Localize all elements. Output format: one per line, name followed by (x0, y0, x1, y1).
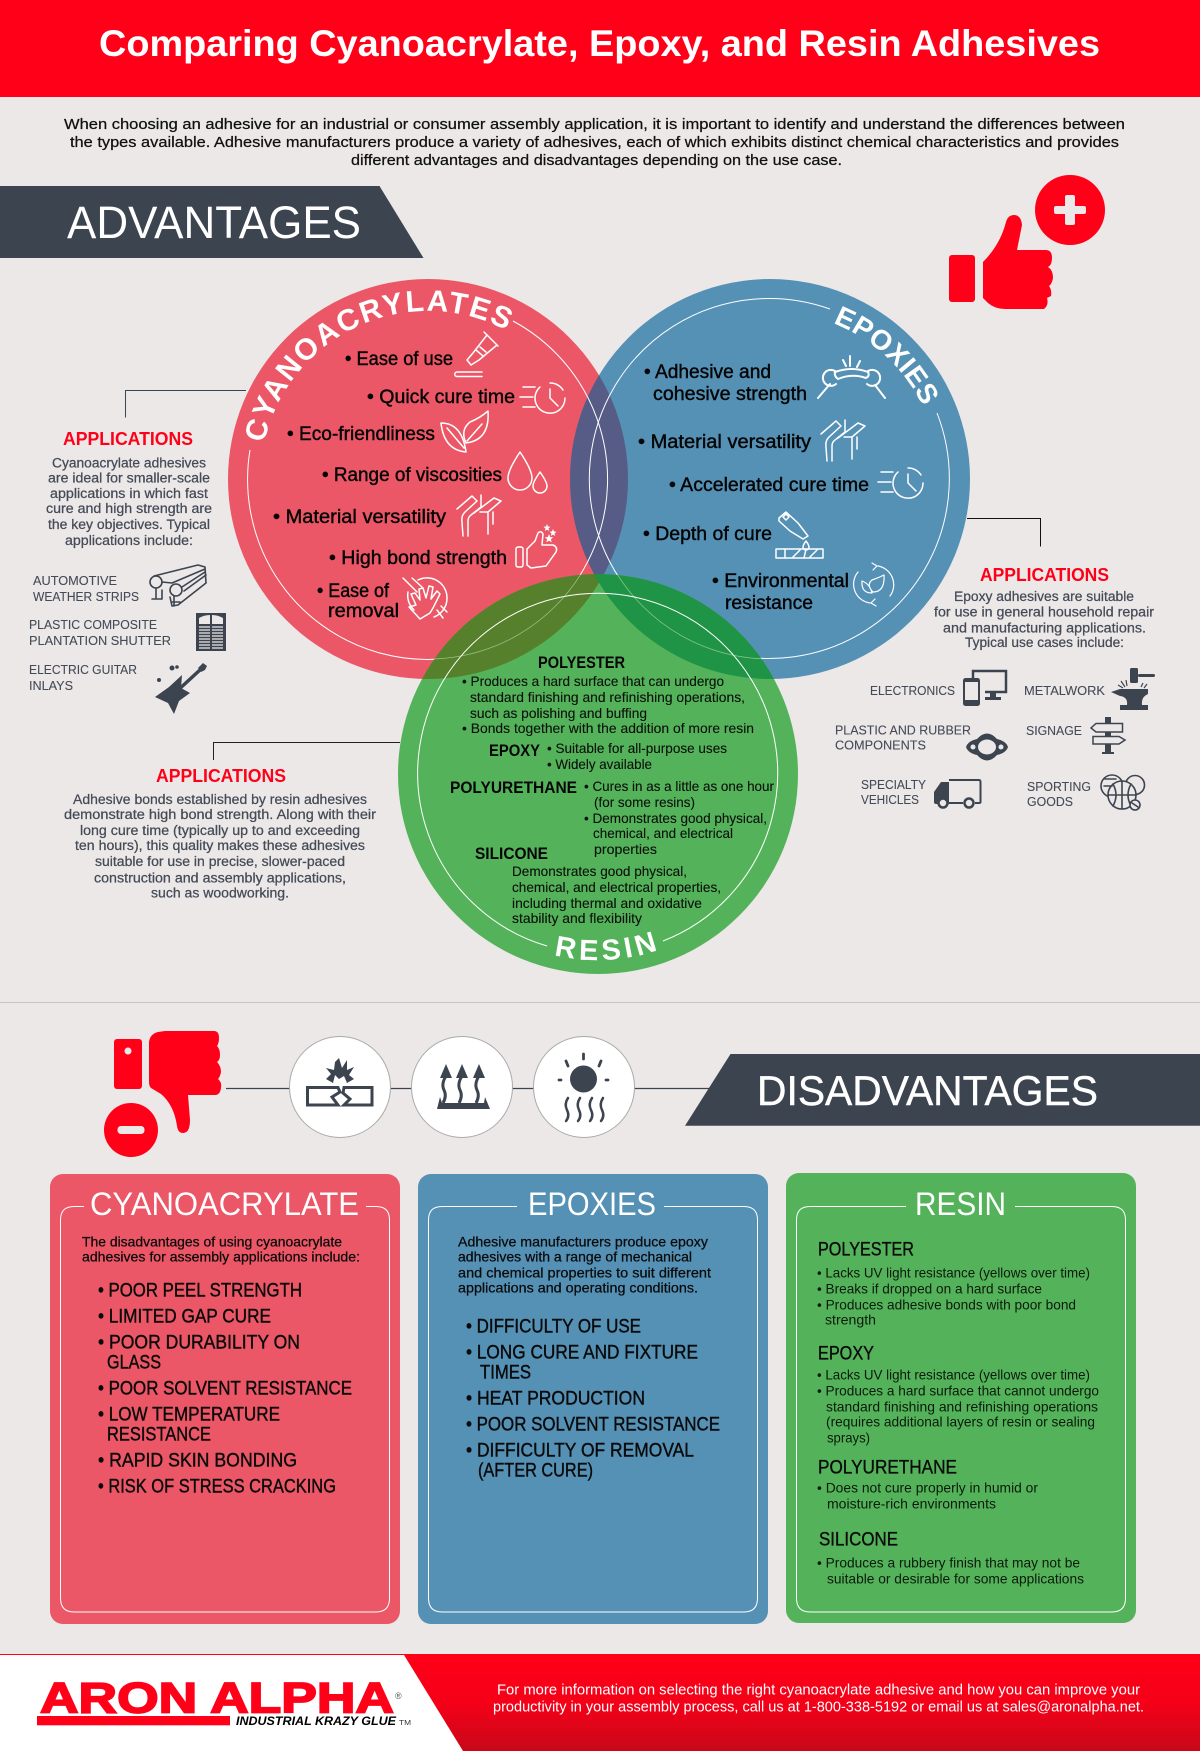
ring: epoxies (589, 298, 949, 658)
silicone: suitable or desirable for some applications (827, 1571, 1084, 1586)
polyester (462, 653, 754, 736)
bullet: ease of use: • Ease of use (345, 349, 453, 370)
epoxy: • Suitable for all-purpose uses (547, 740, 727, 756)
circle: epoxies (570, 279, 970, 679)
silicone: including thermal and oxidative (512, 895, 702, 911)
footer contact text (493, 1682, 1144, 1715)
connector: cyanoacrylate applications (126, 390, 246, 418)
intro paragraph (64, 116, 1125, 169)
polyester: • Bonds together with the addition of more resin (462, 720, 754, 736)
bullet: environmental resistance (712, 571, 849, 614)
bullet: adhesive and cohesive strength: cohesive strength (653, 384, 807, 405)
panel intro (82, 1234, 360, 1265)
polyester: POLYESTER (818, 1240, 914, 1261)
label: metalwork: METALWORK (1024, 683, 1105, 698)
panel intro (458, 1234, 711, 1296)
applications description: construction and assembly applications, (94, 870, 346, 886)
label: electric guitar inlays: ELECTRIC GUITAR (29, 662, 137, 677)
panel bullet list: RESISTANCE (107, 1424, 211, 1446)
polyurethane: moisture-rich environments (827, 1496, 996, 1511)
panel title: EPOXIES (528, 1186, 656, 1222)
icon: shutter (196, 613, 226, 651)
applications heading: APPLICATIONS (156, 765, 286, 786)
overlap: epoxies and resin (594, 574, 774, 679)
silicone (817, 1530, 1084, 1586)
panel bullet list: • RISK OF STRESS CRACKING (98, 1476, 336, 1498)
logo: aron alpha: TM (399, 1720, 411, 1727)
silicone: SILICONE (475, 844, 548, 863)
applications description: for use in general household repair (934, 604, 1155, 619)
panel: resin disadvantages (786, 1173, 1136, 1623)
label: specialty vehicles: SPECIALTY (861, 777, 926, 792)
applications description: suitable for use in precise, slower-paced (95, 854, 345, 869)
ring: cyanoacrylates (248, 321, 608, 659)
label: plantation shutter: PLANTATION SHUTTER (29, 633, 171, 648)
applications description: the key objectives. Typical (48, 517, 210, 532)
applications description: applications in which fast (50, 486, 208, 501)
panel bullet list: TIMES (480, 1361, 531, 1383)
panel bullet list: • HEAT PRODUCTION (466, 1388, 645, 1410)
intro paragraph: When choosing an adhesive for an industrial or consumer assembly application, it is important to identify and understand the differences between (64, 116, 1125, 133)
applications description: applications include: (65, 533, 193, 548)
footer contact text: For more information on selecting the right cyanoacrylate adhesive and how you can improve your (497, 1682, 1140, 1698)
applications description (934, 589, 1155, 650)
resin applications (64, 765, 377, 900)
polyester: standard finishing and refinishing operations, (470, 689, 745, 705)
icon: heat rising circle (412, 1036, 512, 1138)
resin advantages text (450, 653, 774, 926)
bullet: environmental resistance: • Environmental (712, 571, 849, 592)
bullet: ease of removal (317, 581, 399, 622)
applications heading: APPLICATIONS (980, 564, 1109, 585)
icon: signpost (1091, 717, 1125, 754)
title: Comparing Cyanoacrylate, Epoxy, and Resin Adhesives (99, 23, 1100, 64)
polyester: • Breaks if dropped on a hard surface (817, 1281, 1042, 1296)
curved label: cyanoacrylates: CYANOACRYLATES (246, 290, 512, 440)
panel bullet list: • DIFFICULTY OF REMOVAL (466, 1440, 694, 1462)
polyurethane: • Demonstrates good physical, (584, 810, 767, 826)
polyurethane: chemical, and electrical (593, 825, 733, 841)
bullet: adhesive and cohesive strength (644, 362, 807, 405)
panel intro: adhesives for assembly applications include: (82, 1249, 360, 1265)
polyurethane: (for some resins) (594, 794, 695, 810)
panel intro: and chemical properties to suit different (458, 1265, 711, 1281)
label: sporting goods: GOODS (1027, 794, 1073, 809)
applications description: ten hours), this quality makes these adhesives (75, 838, 365, 853)
panel bullet list: • LIMITED GAP CURE (98, 1306, 271, 1328)
panel bullet list: • POOR SOLVENT RESISTANCE (466, 1414, 720, 1436)
applications description: Adhesive bonds established by resin adhesives (73, 792, 367, 807)
cyanoacrylate applications (29, 428, 226, 714)
bullet: accelerated cure time: • Accelerated cure time (669, 475, 869, 496)
polyester: such as polishing and buffing (470, 705, 647, 721)
panel intro: adhesives with a range of mechanical (458, 1249, 692, 1265)
applications heading: APPLICATIONS (63, 428, 193, 449)
silicone: SILICONE (819, 1530, 898, 1551)
label: specialty vehicles: VEHICLES (861, 792, 919, 807)
panel title: CYANOACRYLATE (90, 1186, 359, 1222)
polyester: • Produces a hard surface that can undergo (462, 673, 724, 689)
panel title: RESIN (915, 1186, 1006, 1222)
polyurethane (450, 778, 774, 857)
applications description: Epoxy adhesives are suitable (954, 589, 1134, 604)
polyurethane: • Cures in as a little as one hour (584, 778, 774, 794)
overlap: cyanoacrylates and epoxies (570, 376, 628, 574)
epoxy: standard finishing and refinishing operations (826, 1399, 1098, 1414)
bullet: material versatility: • Material versatility (638, 432, 812, 453)
applications description: are ideal for smaller-scale (48, 470, 210, 486)
advantages heading: ADVANTAGES (67, 197, 361, 248)
epoxy (817, 1344, 1099, 1445)
silicone: Demonstrates good physical, (512, 863, 687, 879)
applications description: and manufacturing applications. (943, 620, 1146, 635)
icon: thumb with stars (516, 524, 557, 568)
panel bullet list: • LONG CURE AND FIXTURE (466, 1342, 698, 1364)
polyester (817, 1240, 1090, 1327)
panel bullet list (466, 1316, 720, 1482)
panel bullet list: • DIFFICULTY OF USE (466, 1316, 641, 1338)
divider (0, 1002, 1200, 1003)
icon: weather strips (150, 565, 206, 606)
panel bullet list: • POOR PEEL STRENGTH (98, 1280, 302, 1302)
bullet: range of viscosities: • Range of viscosities (322, 465, 502, 486)
panel bullet list: GLASS (107, 1351, 161, 1373)
footer contact text: productivity in your assembly process, call us at 1-800-338-5192 or email us at sales@aronalpha.net. (493, 1699, 1144, 1715)
advantages banner (0, 186, 424, 258)
silicone: stability and flexibility (512, 910, 642, 926)
label: sporting goods: SPORTING (1027, 779, 1091, 794)
label: electric guitar inlays (29, 662, 137, 693)
logo: aron alpha: INDUSTRIAL KRAZY GLUE (236, 1714, 397, 1728)
bullet: high bond strength: • High bond strength (329, 548, 507, 569)
epoxy (489, 740, 727, 772)
silicone: • Produces a rubbery finish that may not be (817, 1555, 1080, 1570)
bullet: quick cure time: • Quick cure time (367, 387, 515, 408)
silicone (475, 844, 721, 926)
epoxy: sprays) (827, 1430, 870, 1445)
epoxy: • Lacks UV light resistance (yellows over time) (817, 1367, 1090, 1382)
bullet: adhesive and cohesive strength: • Adhesive and (644, 362, 771, 383)
icon: cohesive bond (818, 356, 885, 398)
overlap: cyanoacrylates and resin (422, 574, 604, 679)
icon: sports balls (1101, 775, 1144, 810)
epoxy: (requires additional layers of resin or sealing (826, 1414, 1095, 1429)
label: specialty vehicles (861, 777, 926, 807)
circle: resin (398, 574, 798, 974)
icon: bonded brackets (457, 495, 501, 536)
epoxy: • Produces a hard surface that cannot undergo (817, 1383, 1099, 1398)
applications description: such as woodworking. (151, 886, 289, 900)
label: sporting goods (1027, 779, 1091, 809)
bullet: ease of removal: • Ease of (317, 581, 390, 602)
label: plastic and rubber components: COMPONENTS (835, 737, 926, 752)
panel bullet list (98, 1280, 352, 1498)
label: plantation shutter (29, 617, 171, 648)
polyurethane: properties (594, 841, 657, 857)
bullet: depth of cure: • Depth of cure (643, 524, 772, 545)
icon: bonded brackets (821, 420, 865, 461)
logo: aron alpha: ARON ALPHA (40, 1675, 394, 1723)
label: signage: SIGNAGE (1026, 723, 1082, 738)
logo: aron alpha: ® (395, 1691, 402, 1701)
label: electronics: ELECTRONICS (870, 683, 955, 698)
label: automotive weather strips: AUTOMOTIVE (33, 573, 117, 588)
silicone: chemical, and electrical properties, (512, 879, 721, 895)
curved label: epoxies: EPOXIES (834, 306, 938, 404)
label: plantation shutter: PLASTIC COMPOSITE (29, 617, 157, 632)
disadvantages heading: DISADVANTAGES (757, 1067, 1098, 1114)
icon: fast clock (520, 383, 565, 413)
icon: thumbs up with plus (949, 175, 1105, 309)
panel: epoxies disadvantages (418, 1174, 768, 1624)
panel: cyanoacrylate disadvantages (50, 1174, 400, 1624)
panel bullet list: (AFTER CURE) (478, 1460, 593, 1482)
polyurethane (817, 1458, 1038, 1511)
bullet: environmental resistance: resistance (725, 593, 813, 614)
polyurethane: POLYURETHANE (450, 778, 577, 797)
connector: epoxy applications (967, 518, 1040, 546)
applications description (46, 456, 212, 548)
applications description: Typical use cases include: (965, 635, 1124, 650)
connector: resin applications (214, 742, 400, 760)
polyester: • Lacks UV light resistance (yellows over time) (817, 1265, 1090, 1280)
panel bullet list: • LOW TEMPERATURE (98, 1404, 280, 1426)
venn diagram (228, 279, 970, 974)
disadvantages banner (685, 1054, 1200, 1126)
icon: wiping hand (403, 578, 447, 619)
icon: fast clock (878, 468, 923, 498)
footer (0, 1654, 1200, 1751)
epoxy: • Widely available (547, 756, 652, 772)
applications description (64, 792, 377, 900)
panel bullet list: • POOR DURABILITY ON (98, 1332, 300, 1354)
icon: broken bond circle (290, 1036, 390, 1138)
intro paragraph: the types available. Adhesive manufacturers produce a variety of adhesives, each of which exhibits distinct chemical characteristics and provides (70, 134, 1119, 151)
faint rings inside resin (434, 574, 762, 660)
panel intro: applications and operating conditions. (458, 1280, 698, 1296)
epoxy: EPOXY (818, 1344, 874, 1365)
icon: truck (934, 780, 980, 808)
applications description: Cyanoacrylate adhesives (52, 456, 206, 470)
icon: environment cycle (854, 563, 894, 606)
logo: aron alpha (37, 1675, 411, 1728)
epoxy: EPOXY (489, 741, 541, 760)
icon: drops (508, 452, 547, 493)
icon: electric guitar (155, 663, 207, 714)
icon: applicator over surface (776, 512, 823, 558)
epoxy applications (835, 564, 1155, 810)
icon: gasket (966, 734, 1008, 760)
icon: electronics (963, 671, 1006, 706)
bullet: eco-friendliness: • Eco-friendliness (287, 424, 435, 445)
circle: cyanoacrylates (228, 279, 628, 679)
panel bullet list: • POOR SOLVENT RESISTANCE (98, 1378, 352, 1400)
applications description: cure and high strength are (46, 501, 212, 516)
bullet: material versatility: • Material versatility (273, 507, 447, 528)
header band (0, 0, 1200, 97)
label: automotive weather strips (33, 573, 139, 604)
bullet: ease of removal: removal (328, 601, 399, 622)
icon: sun heat circle (534, 1036, 634, 1138)
icon: glue tube (455, 332, 498, 376)
panel bullet list: • RAPID SKIN BONDING (98, 1450, 297, 1472)
polyester: POLYESTER (538, 653, 625, 672)
icon: thumbs down with minus (104, 1031, 221, 1157)
label: automotive weather strips: WEATHER STRIPS (33, 589, 139, 604)
intro paragraph: different advantages and disadvantages depending on the use case. (351, 152, 842, 169)
cyanoacrylate advantages list (273, 332, 565, 622)
connector line across disadvantage icons (226, 1088, 710, 1090)
label: plastic and rubber components: PLASTIC AND RUBBER (835, 722, 971, 737)
label: electric guitar inlays: INLAYS (29, 678, 73, 693)
panel intro: Adhesive manufacturers produce epoxy (458, 1234, 708, 1250)
applications description: demonstrate high bond strength. Along with their (64, 807, 377, 822)
applications description: long cure time (typically up to and exceeding (80, 823, 360, 838)
epoxy advantages list (638, 356, 923, 614)
icon: leaves (441, 411, 488, 452)
icon: anvil and hammer (1111, 668, 1155, 710)
panel intro: The disadvantages of using cyanoacrylate (82, 1234, 342, 1250)
label: plastic and rubber components (835, 722, 971, 752)
ring: resin (418, 593, 778, 946)
polyurethane: • Does not cure properly in humid or (817, 1480, 1038, 1495)
curved label: resin: RESIN (556, 932, 656, 960)
polyester: strength (825, 1312, 876, 1327)
polyester: • Produces adhesive bonds with poor bond (817, 1297, 1076, 1312)
polyurethane: POLYURETHANE (818, 1458, 957, 1479)
